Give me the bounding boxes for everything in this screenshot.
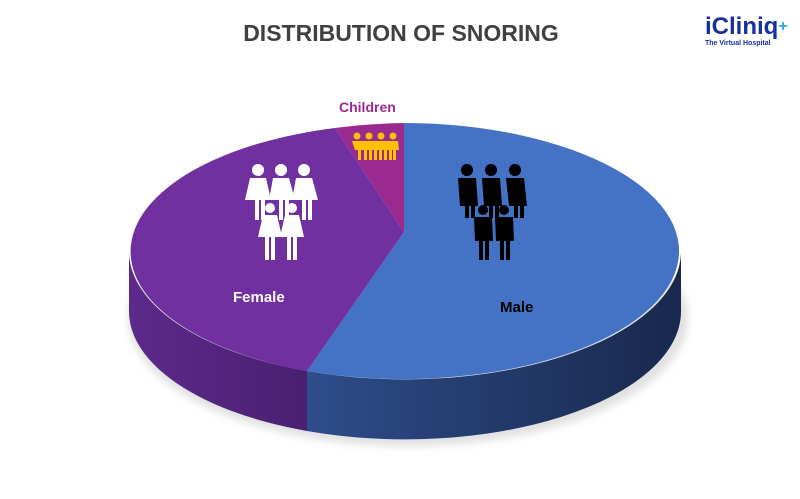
- label: children: Children: [339, 99, 396, 115]
- icon: males: [458, 164, 527, 260]
- label: female: Female: [233, 289, 285, 306]
- logo: iCliniq+: [705, 13, 788, 40]
- icon: females: [245, 164, 318, 260]
- logo: The Virtual Hospital: [705, 40, 771, 47]
- title: DISTRIBUTION OF SNORING: [243, 20, 559, 46]
- slice: children: [335, 123, 404, 232]
- side: male: [307, 251, 681, 439]
- label: male: Male: [500, 299, 533, 316]
- side: female: [129, 251, 307, 431]
- slice: male: [307, 123, 679, 379]
- slice: female: [131, 128, 404, 371]
- icon: children: [352, 132, 399, 160]
